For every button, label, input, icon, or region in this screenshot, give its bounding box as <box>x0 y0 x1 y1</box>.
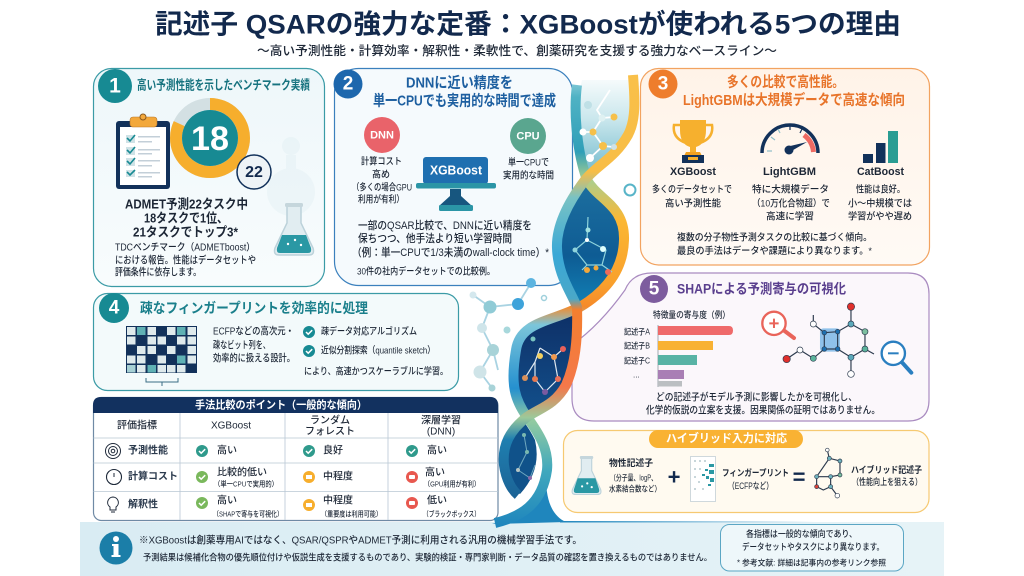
row: computational cost: （GPU利用が有利） <box>424 478 480 488</box>
icon: hybrid molecule <box>815 448 842 498</box>
bar chart: feature contribution <box>624 309 733 387</box>
panel 2: speed <box>334 68 572 286</box>
molecule: lens 3 <box>516 433 535 480</box>
table header row: フォレスト <box>305 426 355 438</box>
badge 1: 1 <box>109 74 121 98</box>
CPU text: 単一CPUで <box>508 156 549 168</box>
XGBoost column <box>652 166 732 210</box>
molecule: lens 1 <box>572 217 612 275</box>
icon: faded flask <box>267 137 315 216</box>
helix lens 2 <box>516 310 577 415</box>
benchmark note: における報告。性能はデータセットや <box>115 254 256 266</box>
heading 2: 単一CPUでも実用的な時間で達成 <box>373 92 556 110</box>
ECFP text <box>213 324 295 364</box>
footer note: ※XGBoostは創薬専用AIではなく、QSAR/QSPRやADMET予測に利用される汎用の機械学習手法です。 <box>139 534 582 546</box>
row: computational cost: 高い <box>425 466 445 478</box>
LightGBM column: 特に大規模データ <box>752 184 829 196</box>
equals sign: = <box>793 464 805 490</box>
bar chart: feature contribution: 記述子C <box>624 356 650 366</box>
row: interpretability: 解釈性 <box>128 498 158 510</box>
footer band <box>80 522 944 576</box>
icon: clipboard <box>116 114 170 189</box>
benchmark note: 評価条件に依存します。 <box>115 266 201 278</box>
XGBoost column: XGBoost <box>670 166 716 178</box>
badge: total 22 <box>237 155 271 189</box>
donut chart: 18 of 22 <box>176 104 244 172</box>
badge 2: 2 <box>343 74 353 94</box>
hybrid descriptor text: （性能向上を狙える） <box>852 476 922 487</box>
benchmark headline: 21タスクでトップ3* <box>133 224 239 240</box>
molecule with highlight <box>783 303 874 377</box>
DNN circle <box>364 117 400 153</box>
check: sparse algorithm <box>303 326 417 338</box>
LightGBM column: （10万化合物超）で <box>752 198 830 210</box>
badge 4 <box>99 293 129 323</box>
ring decoration <box>624 184 636 196</box>
physical descriptors text: （分子量、logP、 <box>610 472 657 482</box>
DNN text: 高め <box>372 168 390 180</box>
molecule: top of helix <box>580 90 618 162</box>
CatBoost column <box>848 166 912 222</box>
comparison note <box>677 232 872 257</box>
badge: total 22: 22 <box>245 164 263 181</box>
table header row: ランダム <box>310 414 350 426</box>
heading 2 <box>373 74 556 110</box>
CatBoost column: 小〜中規模では <box>848 198 912 210</box>
hybrid descriptor text: ハイブリッド記述子 <box>851 464 922 475</box>
footer caveat box <box>720 524 904 571</box>
heading 4: 疎なフィンガープリントを効率的に処理 <box>140 300 368 316</box>
ECFP text: ECFPなどの高次元・ <box>213 324 294 338</box>
CatBoost column: 学習がやや遅め <box>848 210 912 222</box>
CPU circle: CPU <box>516 130 540 142</box>
heading 1: 高い予測性能を示したベンチマーク実績 <box>137 78 310 92</box>
SHAP description: 化学的仮説の立案を支援。因果関係の証明ではありません。 <box>646 404 880 416</box>
table header row: 深層学習 <box>421 414 461 426</box>
molecule: lens 2 <box>522 336 566 395</box>
comparison note: 複数の分子物性予測タスクの比較に基づく傾向。 <box>677 232 872 244</box>
DNA helix <box>492 75 815 524</box>
footer caveat box: データセットやタスクにより異なります。 <box>742 541 884 552</box>
footer caveat box: * 参考文献: 詳細は記事内の参考リンク参照 <box>737 558 886 568</box>
panel: hybrid input <box>564 430 929 512</box>
CPU text: 実用的な時間 <box>503 170 554 182</box>
benchmark headline <box>125 196 248 240</box>
panel 3: comparison <box>640 68 930 265</box>
ECFP text: 効率的に扱える設計。 <box>213 352 295 364</box>
row: computational cost: 比較的低い <box>217 466 267 478</box>
check: sparse algorithm: 疎データ対応アルゴリズム <box>321 326 417 338</box>
table header row: 評価指標 <box>117 418 157 432</box>
row: interpretability: （ブラックボックス） <box>423 508 480 518</box>
icon: trophy <box>674 120 712 163</box>
physical descriptors text <box>609 457 661 494</box>
physical descriptors text: 物性記述子 <box>609 457 653 468</box>
XGBoost column: 多くのデータセットで <box>652 184 732 196</box>
heading 3: LightGBMは大規模データで高速な傾向 <box>683 91 905 109</box>
badge 3: 3 <box>658 74 668 94</box>
title: 記述子 QSARの強力な定番：XGBoostが使われる5つの理由 <box>155 8 901 40</box>
sparse matrix grid <box>126 326 197 373</box>
DNN text: 利用が有利） <box>358 194 404 206</box>
row: interpretability: 中程度 <box>323 494 353 506</box>
icon: XGBoost laptop <box>416 157 496 211</box>
badge 1 <box>98 69 132 103</box>
row: computational cost: 計算コスト <box>128 470 178 482</box>
CPU circle <box>510 118 546 154</box>
speed description: （例：単一CPUで1/3未満のwall-clock time）* <box>352 245 550 259</box>
hybrid title pill: ハイブリッド入力に対応 <box>666 431 787 445</box>
row: predictive performance <box>106 444 447 458</box>
table header row: XGBoost <box>211 420 251 432</box>
icon: bars <box>863 131 898 163</box>
panel 1: benchmark <box>94 68 324 286</box>
badge 2 <box>334 70 362 98</box>
footer caveat box: 各指標は一般的な傾向であり、 <box>746 528 857 539</box>
bar chart: feature contribution: ... <box>633 370 640 380</box>
molecule: pale cluster beside helix <box>470 278 546 392</box>
scalable text: により、高速かつスケーラブルに学習。 <box>304 366 448 378</box>
badge 4: 4 <box>109 298 120 318</box>
speed description: 30件の社内データセットでの比較例。 <box>357 266 495 278</box>
row: interpretability: 高い <box>217 494 237 506</box>
table grid <box>94 413 498 520</box>
helix strand B <box>495 85 624 523</box>
icon: magnifier plus <box>762 312 794 338</box>
icon: flask <box>274 203 314 255</box>
bracket <box>146 378 178 386</box>
hybrid title pill <box>649 430 803 448</box>
SHAP description <box>646 390 880 416</box>
bar chart: feature contribution: 記述子B <box>624 340 650 350</box>
badge 5 <box>640 275 668 303</box>
table title: 手法比較のポイント（一般的な傾向） <box>195 398 367 412</box>
hybrid descriptor text <box>851 464 922 487</box>
plus sign: + <box>668 464 680 490</box>
donut chart: 18 of 22: 18 <box>191 120 229 158</box>
fingerprint text: フィンガープリント <box>722 467 789 478</box>
table header row: (DNN) <box>427 426 455 438</box>
XGBoost column: 高い予測性能 <box>665 198 721 210</box>
icon: flask small <box>572 456 601 494</box>
speed description <box>352 218 550 278</box>
comparison note: 最良の手法はデータや課題により異なります。* <box>677 245 872 257</box>
subtitle: 〜高い予測性能・計算効率・解釈性・柔軟性で、創薬研究を支援する強力なベースライン〜 <box>257 43 777 58</box>
benchmark note <box>115 242 256 278</box>
icon: XGBoost laptop: XGBoost <box>430 162 483 178</box>
benchmark note: TDCベンチマーク（ADMETboost） <box>115 242 255 254</box>
helix lens 3 <box>507 422 537 494</box>
DNN text: （多くの場合GPU <box>352 182 412 194</box>
heading 5: SHAPによる予測寄与の可視化 <box>677 280 846 296</box>
CatBoost column: 性能は良好。 <box>856 184 905 196</box>
LightGBM column: LightGBM <box>763 166 816 178</box>
CatBoost column: CatBoost <box>857 166 904 178</box>
helix strand A <box>504 75 634 495</box>
row: predictive performance: 高い <box>427 444 447 456</box>
DNN text <box>352 156 412 206</box>
row: computational cost: 中程度 <box>323 470 353 482</box>
footer note: 予測結果は候補化合物の優先順位付けや仮説生成を支援するものであり、実験的検証・専門家判断・データ品質の確認を置き換えるものではありません。 <box>143 552 712 562</box>
badge 5: 5 <box>649 278 660 300</box>
benchmark headline: ADMET予測22タスク中 <box>125 196 248 212</box>
check: quantile sketch <box>303 344 435 357</box>
DNN text: 計算コスト <box>361 156 402 168</box>
bar chart: feature contribution: 特徴量の寄与度（例） <box>653 309 730 320</box>
row: computational cost <box>106 466 480 488</box>
row: interpretability: 低い <box>427 494 447 506</box>
CPU text <box>503 156 554 182</box>
DNN circle: DNN <box>370 130 394 142</box>
bar chart: feature contribution: 記述子A <box>624 326 651 336</box>
helix base sweep into footer <box>492 478 815 524</box>
heading 2: DNNに近い精度を <box>406 74 513 92</box>
row: interpretability: （重要度は利用可能） <box>321 508 382 518</box>
speed description: 一部のQSAR比較で、DNNに近い精度を <box>358 218 532 232</box>
speed description: 保ちつつ、他手法より短い学習時間 <box>358 231 512 245</box>
row: predictive performance: 良好 <box>323 444 343 456</box>
footer note <box>139 534 712 562</box>
benchmark headline: 18タスクで1位、 <box>144 210 228 226</box>
fingerprint text <box>722 467 789 491</box>
physical descriptors text: 水素結合数など） <box>609 484 661 494</box>
panel: comparison table <box>93 397 498 520</box>
helix lens 1 <box>558 182 622 305</box>
helix top area <box>577 80 634 180</box>
row: computational cost: （単一CPUで実用的） <box>214 478 278 488</box>
row: interpretability: （SHAPで寄与を可視化） <box>213 508 283 518</box>
LightGBM column: 高速に学習 <box>766 210 814 222</box>
icon: magnifier minus <box>882 342 911 373</box>
row: predictive performance: 高い <box>217 444 237 456</box>
table header row <box>117 414 461 438</box>
ECFP text: 疎なビット列を、 <box>213 338 270 352</box>
check: quantile sketch: 近似分割探索（quantile sketch） <box>321 344 435 356</box>
badge 3 <box>648 70 678 98</box>
fingerprint text: （ECFPなど） <box>728 481 773 491</box>
LightGBM column <box>752 166 830 222</box>
row: interpretability <box>108 494 480 518</box>
icon: fingerprint card <box>690 456 716 502</box>
heading 3: 多くの比較で高性能。 <box>727 73 844 91</box>
panel 5: SHAP <box>572 273 929 421</box>
icon: information <box>100 532 132 564</box>
SHAP description: どの記述子がモデル予測に影響したかを可視化し、 <box>656 390 857 404</box>
row: predictive performance: 予測性能 <box>128 444 168 456</box>
icon: gauge <box>762 125 818 154</box>
heading 3 <box>683 73 905 109</box>
panel 4: sparse fingerprints <box>94 293 458 390</box>
